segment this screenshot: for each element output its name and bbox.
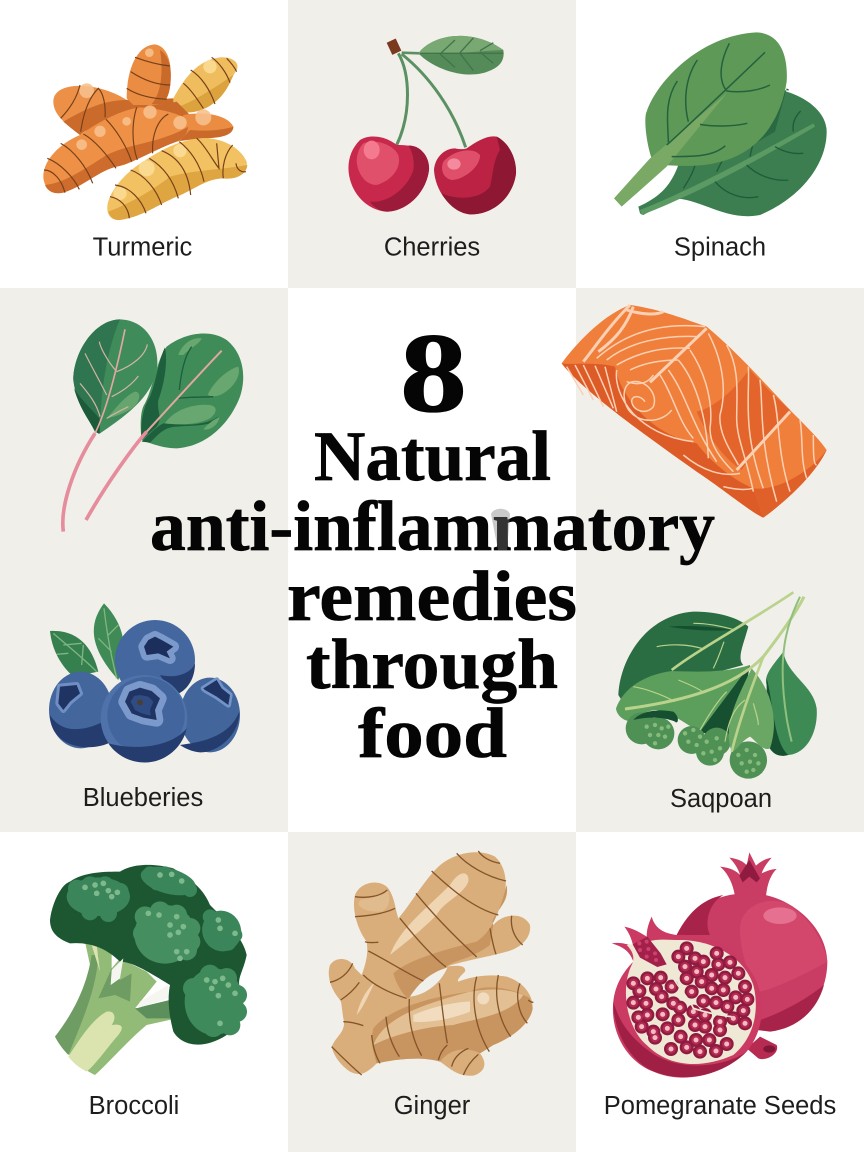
label: Broccoli: Broccoli xyxy=(89,1092,179,1120)
icon: blueberries xyxy=(49,603,240,763)
title: food xyxy=(358,695,507,773)
icon: turmeric xyxy=(43,44,247,220)
icon: pomegranate xyxy=(612,852,827,1078)
icon: ginger xyxy=(329,851,533,1076)
label: Ginger: Ginger xyxy=(394,1092,471,1120)
label: Turmeric: Turmeric xyxy=(93,234,193,262)
title: remedies xyxy=(287,558,577,636)
title xyxy=(150,310,715,773)
label: Saqpoan: Saqpoan xyxy=(670,785,772,813)
title: 8 xyxy=(400,310,467,436)
title: through xyxy=(306,626,558,704)
icon: broccoli xyxy=(50,861,248,1075)
label: Pomegranate Seeds: Pomegranate Seeds xyxy=(604,1092,836,1120)
title: Natural xyxy=(314,418,551,496)
label: Spinach: Spinach xyxy=(674,234,766,262)
icon: chard leaves xyxy=(63,319,243,532)
label: Cherries: Cherries xyxy=(384,234,480,262)
icon: leafy greens xyxy=(616,592,817,772)
label: Blueberies: Blueberies xyxy=(83,784,203,812)
icon: spinach xyxy=(614,32,827,216)
icon: salmon fillet xyxy=(562,305,827,518)
icon: cherries xyxy=(348,36,516,214)
title: anti-inflammatory xyxy=(150,488,715,566)
